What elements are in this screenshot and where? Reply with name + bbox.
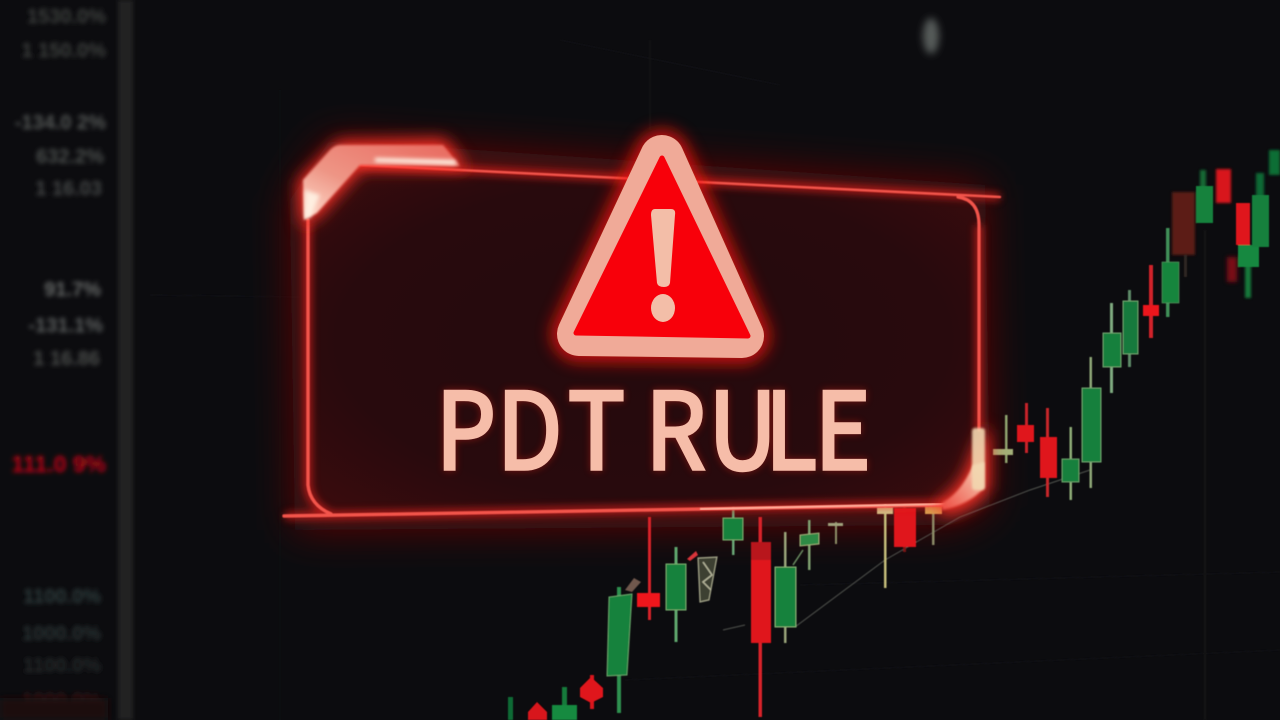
blurred price labels: 1100.0% — [23, 586, 101, 608]
panel fill — [308, 166, 979, 514]
rising candles with wicks — [607, 487, 843, 717]
top-left highlights — [305, 158, 457, 218]
sidebar divider — [118, 0, 133, 720]
candlestick chart, right section — [993, 150, 1280, 500]
blurred price labels: 111.0 9% — [11, 451, 106, 477]
blurred price labels: 91.7% — [44, 279, 101, 301]
blurred price labels — [11, 6, 106, 712]
bottom-right highlight — [972, 428, 985, 490]
bottom left candles — [508, 675, 603, 720]
blurred price labels: 1 16.86 — [33, 348, 100, 370]
blurred top marker — [923, 18, 939, 54]
panel border glow — [285, 165, 1000, 516]
highlight on bottom line — [700, 504, 945, 509]
blurred price labels: 1100.0% — [23, 655, 101, 677]
blurred price labels: 1000.0% — [22, 623, 101, 645]
top-left corner bracket — [303, 145, 460, 220]
panel outer glow — [290, 140, 990, 530]
exclamation mark — [651, 209, 675, 322]
blurred price labels: 1000.0% — [22, 690, 101, 712]
triangle outline — [579, 157, 742, 336]
title text: PDT RULE — [436, 347, 871, 501]
blurred price labels: 1 16.03 — [35, 178, 102, 200]
panel border lines — [284, 165, 1000, 516]
title text: PDT RULE — [436, 347, 871, 501]
blurred price labels: 1530.0% — [27, 6, 106, 28]
mid candles — [993, 290, 1138, 500]
upper candles — [1143, 150, 1280, 338]
bottom-right corner glow — [940, 430, 986, 512]
red base strip — [0, 698, 108, 720]
faint moving average line — [723, 470, 1090, 630]
blurred price labels: 1 150.0% — [21, 40, 106, 62]
blurred price labels: 632.2% — [36, 146, 104, 168]
warning panel — [284, 143, 1000, 516]
blurred sidebar with price list — [0, 0, 133, 720]
blurred price labels: -131.1% — [28, 315, 103, 337]
icon glow — [579, 157, 742, 336]
candlestick chart, lower section — [508, 375, 1090, 720]
bottom-right corner bracket — [942, 462, 984, 510]
triangle fill — [576, 158, 748, 336]
warning triangle icon — [576, 157, 748, 336]
candles crossing the panel edge — [877, 375, 942, 588]
top-left corner glow — [302, 143, 460, 220]
blurred price labels: -134.0 2% — [15, 112, 106, 134]
